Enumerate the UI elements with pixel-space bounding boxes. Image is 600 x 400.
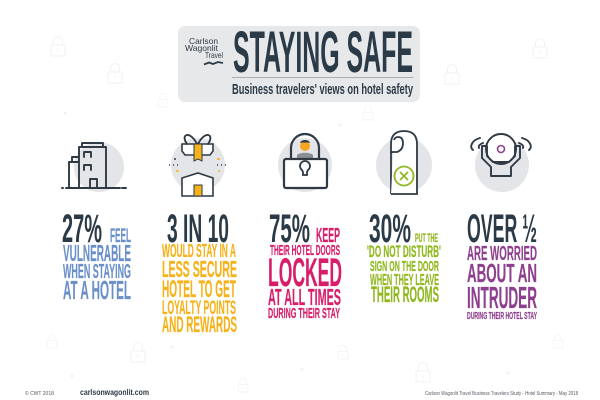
text: FEEL xyxy=(110,226,131,247)
text: WOULD STAY IN A xyxy=(162,241,236,261)
text: LOYALTY POINTS xyxy=(162,298,236,319)
icon: alarm bell xyxy=(471,134,531,192)
footer: website: carlsonwagonlit.com xyxy=(80,387,149,397)
text: VULNERABLE xyxy=(63,240,131,266)
icon: hotel building xyxy=(62,142,126,192)
footer: source note: Carlson Wagonlit Travel Business Travelers Study - Hotel Summary - May 2018 xyxy=(425,391,578,397)
logo: Carlson Wagonlit Travel: Carlson xyxy=(189,36,218,46)
footer: copyright: © CWT 2018 xyxy=(25,390,54,397)
text: WHEN THEY LEAVE xyxy=(370,272,439,289)
text: WHEN STAYING xyxy=(63,261,131,283)
text: HOTEL TO GET xyxy=(162,276,236,303)
subtitle: Business travelers' views on hotel safety xyxy=(232,81,413,98)
statistic: 30% do not disturb: PUT THE xyxy=(415,233,438,245)
statistic: 30% do not disturb xyxy=(367,207,441,307)
text: THEIR ROOMS xyxy=(371,282,439,307)
text: 'DO NOT DISTURB' xyxy=(367,242,441,261)
icon: gift box xyxy=(169,135,226,196)
text: LOCKED xyxy=(268,251,342,295)
text: DURING THEIR STAY xyxy=(268,305,340,322)
text: AT A HOTEL xyxy=(63,275,131,305)
header panel xyxy=(178,20,420,102)
background lock pattern xyxy=(47,36,563,392)
text: AND REWARDS xyxy=(162,312,237,337)
text: THEIR HOTEL DOORS xyxy=(270,242,340,259)
statistic: 30% do not disturb: 30% xyxy=(369,207,411,251)
statistic: over half worried about an intruder: ABOUT AN xyxy=(467,258,537,288)
text: AT ALL TIMES xyxy=(268,284,341,310)
statistic: 3 in 10 xyxy=(162,207,237,337)
text: KEEP xyxy=(316,225,340,247)
statistic: 27% feel vulnerable: 27% xyxy=(62,207,102,251)
text: LESS SECURE xyxy=(162,256,237,282)
logo: Carlson Wagonlit Travel: Travel xyxy=(205,50,223,60)
logo: Carlson Wagonlit Travel: Wagonlit xyxy=(185,43,219,53)
logo: Carlson Wagonlit Travel xyxy=(185,36,223,64)
statistic: over half worried about an intruder xyxy=(467,207,537,322)
statistic: 27% feel vulnerable xyxy=(62,207,131,305)
icon: do not disturb door hanger xyxy=(376,131,432,194)
statistic: 3 in 10: 3 IN 10 xyxy=(167,207,229,251)
text: SIGN ON THE DOOR xyxy=(370,258,439,275)
icon: padlock with person xyxy=(278,134,332,192)
statistic: 75% keep doors locked xyxy=(268,207,342,322)
statistic: 75% keep doors locked: 75% xyxy=(269,207,310,251)
